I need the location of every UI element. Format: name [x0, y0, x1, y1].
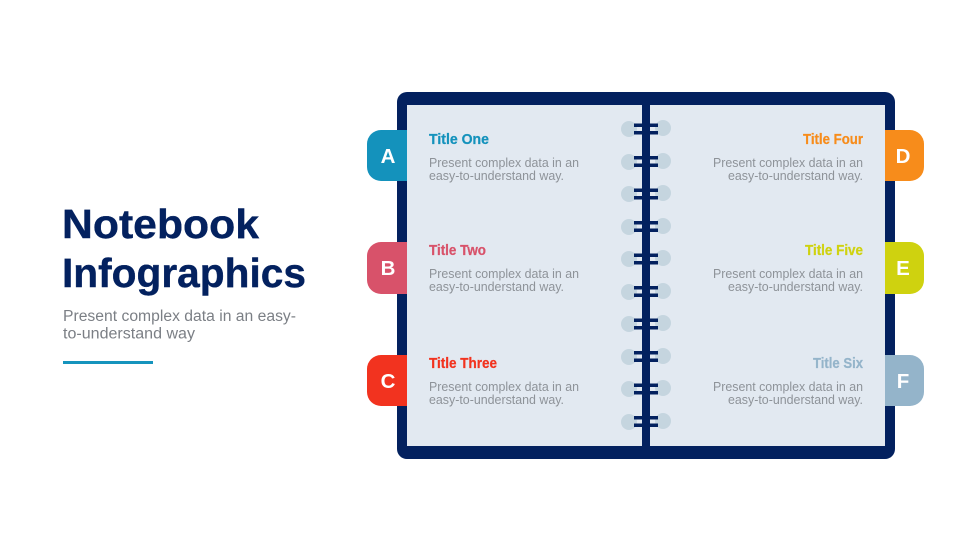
text block: Title One: easy-to-understand way.: [429, 169, 564, 183]
title: Notebook: [62, 201, 259, 247]
text block: Title Two: Present complex data in an: [429, 267, 579, 281]
text block: Title Four: [713, 132, 863, 183]
title: [62, 201, 306, 296]
tab D: [885, 130, 924, 181]
text block: Title Five: Title Five: [805, 243, 863, 259]
tab D: D: [896, 145, 910, 168]
spine: [642, 105, 650, 446]
tab B: [367, 242, 407, 294]
subtitle: to-understand way: [63, 326, 195, 342]
text block: Title Three: Present complex data in an: [429, 380, 579, 394]
tab A: [367, 130, 407, 181]
tab C: [367, 355, 407, 406]
text block: Title Five: [713, 243, 863, 294]
text block: Title One: [429, 132, 579, 183]
text block: Title Five: easy-to-understand way.: [728, 280, 863, 294]
text block: Title Two: Title Two: [429, 243, 486, 259]
subtitle: Present complex data in an easy-: [63, 308, 296, 325]
accent line: [63, 361, 153, 364]
tab inner edges over cover: [397, 130, 895, 406]
text block: Title Three: [429, 356, 579, 407]
text block: Title Six: easy-to-understand way.: [728, 393, 863, 407]
text block: Title Four: Present complex data in an: [713, 156, 863, 170]
text block: Title One: Present complex data in an: [429, 156, 579, 170]
text block: Title Five: Present complex data in an: [713, 267, 863, 281]
text block: Title Six: Present complex data in an: [713, 380, 863, 394]
tab E: [885, 242, 924, 294]
tab A: A: [381, 145, 396, 168]
text block: Title Three: Title Three: [429, 356, 497, 372]
tab F: [885, 355, 924, 406]
title: Infographics: [62, 250, 306, 296]
notebook pages: [407, 105, 885, 446]
spiral rings: [621, 120, 671, 430]
tab F: F: [897, 370, 909, 393]
text block: Title Four: easy-to-understand way.: [728, 169, 863, 183]
text block: Title Six: Title Six: [813, 356, 863, 372]
text block: Title Three: easy-to-understand way.: [429, 393, 564, 407]
tab E: E: [896, 257, 910, 280]
text block: Title Two: [429, 243, 579, 294]
subtitle: [63, 308, 296, 342]
tab B: B: [381, 257, 395, 280]
text block: Title One: Title One: [429, 132, 489, 148]
tab C: C: [381, 370, 396, 393]
text block: Title Six: [713, 356, 863, 407]
notebook cover: [397, 92, 895, 459]
text block: Title Four: Title Four: [803, 132, 863, 148]
text block: Title Two: easy-to-understand way.: [429, 280, 564, 294]
